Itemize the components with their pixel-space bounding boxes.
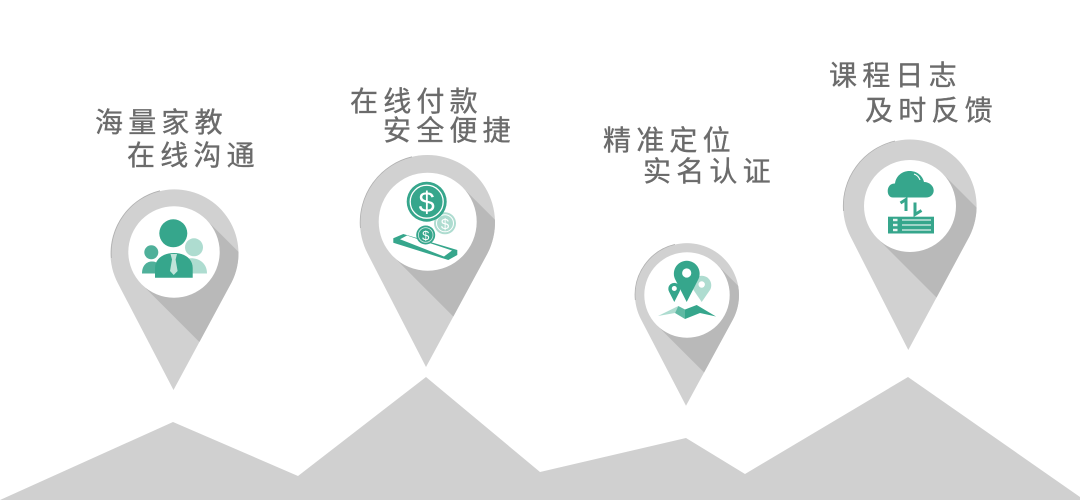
heading: 课程日志 及时反馈: 课程日志	[829, 60, 962, 91]
heading: 精准定位 实名认证: 精准定位	[603, 125, 736, 156]
pin 3: location	[634, 243, 739, 406]
pin 4: course log	[842, 140, 977, 350]
icon: map pins	[658, 261, 716, 319]
heading: 课程日志 及时反馈: 及时反馈	[865, 95, 998, 126]
heading: 课程日志 及时反馈	[829, 60, 998, 126]
icon: coins and phone	[393, 182, 457, 260]
heading: 海量家教 在线沟通: 海量家教	[95, 107, 228, 138]
heading: 在线付款 安全便捷: 在线付款	[350, 86, 483, 117]
mountain silhouette	[0, 377, 1080, 500]
icon: cloud sync and list	[888, 171, 934, 234]
pin 1: family tutors	[110, 189, 238, 390]
heading: 精准定位 实名认证: 实名认证	[643, 156, 776, 187]
icon: coins and phone: $	[441, 216, 450, 233]
heading: 海量家教 在线沟通	[95, 107, 260, 171]
icon: coins and phone: $	[422, 228, 430, 243]
pin 2: payment	[360, 155, 495, 367]
icon: coins and phone: $	[419, 187, 435, 219]
heading: 精准定位 实名认证	[603, 125, 776, 187]
icon: people with tie	[142, 219, 207, 278]
heading: 在线付款 安全便捷: 安全便捷	[383, 115, 516, 146]
heading: 海量家教 在线沟通: 在线沟通	[127, 140, 260, 171]
heading: 在线付款 安全便捷	[350, 86, 516, 146]
